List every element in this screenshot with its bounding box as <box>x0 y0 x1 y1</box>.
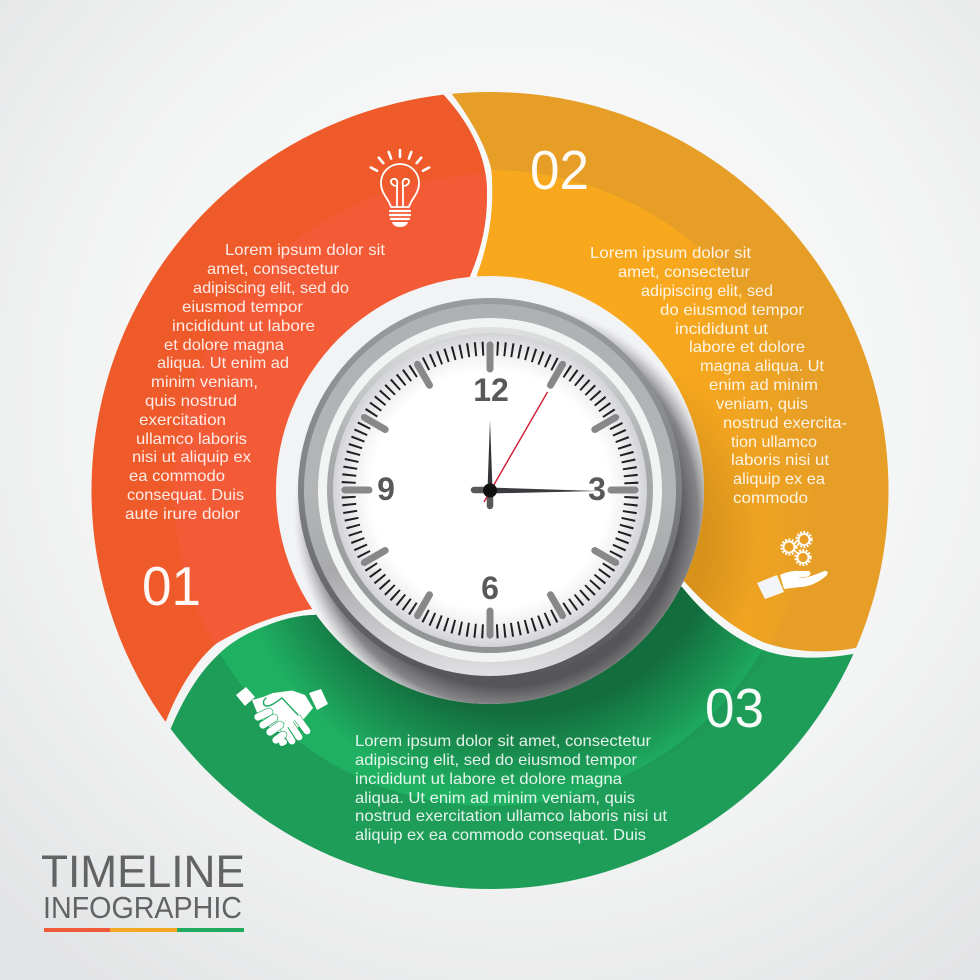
right hand fingers <box>283 712 307 741</box>
text block: segment 03: nostrud exercitation ullamco laboris nisi ut <box>355 808 668 825</box>
clock case inner metal <box>304 304 676 676</box>
text block: segment 01: consequat. Duis <box>127 487 244 504</box>
text block: segment 03: aliqua. Ut enim ad minim veniam, quis <box>355 790 635 807</box>
numerals: 12 <box>473 372 509 408</box>
text block: segment 01: exercitation <box>139 412 226 429</box>
number 02: 02 <box>530 139 589 201</box>
numerals <box>377 372 606 606</box>
panel: segment 02 orange <box>452 92 888 652</box>
minute ticks <box>348 348 632 632</box>
text block: segment 01: quis nostrud <box>145 393 237 410</box>
number 01: 01 <box>142 555 201 617</box>
left hand fingers <box>258 712 284 743</box>
text block: segment 02: laboris nisi ut <box>731 452 830 469</box>
right cuff <box>309 689 328 710</box>
text block: segment 02: amet, consectetur <box>618 264 751 281</box>
text block: segment 03: incididunt ut labore et dolore magna <box>355 771 622 788</box>
hour ticks <box>345 345 635 635</box>
text block: segment 02 <box>590 245 847 507</box>
numerals: 3 <box>588 471 606 507</box>
joined hands <box>252 690 313 736</box>
text block: segment 01: adipiscing elit, sed do <box>193 280 349 297</box>
text block: segment 02: aliquip ex ea <box>733 471 825 488</box>
clock face <box>333 333 647 647</box>
text block: segment 01: ullamco laboris <box>136 431 247 448</box>
text block: segment 01: et dolore magna <box>164 337 284 354</box>
text block: segment 03: adipiscing elit, sed do eiusmod tempor <box>355 752 638 769</box>
text block: segment 02: commodo <box>733 490 808 507</box>
circular segments <box>92 92 888 889</box>
panel: segment 03 green <box>170 586 854 889</box>
clock cast shadow <box>296 312 704 704</box>
number 03: 03 <box>705 677 764 739</box>
text block: segment 02: tion ullamco <box>731 434 817 451</box>
text block: segment 02: do eiusmod tempor <box>660 302 805 319</box>
panel: segment 01 red <box>92 94 488 722</box>
text block: segment 02: veniam, quis <box>716 396 808 413</box>
title underline <box>44 928 244 932</box>
text block: segment 01: incididunt ut labore <box>172 318 315 335</box>
clock hands <box>474 392 598 506</box>
text block: segment 02: Lorem ipsum dolor sit <box>590 245 752 262</box>
clock halo ring <box>276 276 704 704</box>
icon: light bulb <box>371 150 429 227</box>
cuff <box>757 575 784 599</box>
thumb outline <box>263 698 298 715</box>
text block: segment 03: aliquip ex ea commodo consequat. Duis <box>355 827 646 844</box>
hand <box>780 571 828 589</box>
text block: segment 01: aliqua. Ut enim ad <box>157 355 289 372</box>
left cuff <box>236 687 255 706</box>
icon: handshake <box>236 687 328 743</box>
white bezel <box>318 318 662 662</box>
text block: segment 03: Lorem ipsum dolor sit amet, consectetur <box>355 733 652 750</box>
text block: segment 01: aute irure dolor <box>125 506 241 523</box>
text block: segment 02: magna aliqua. Ut <box>700 358 825 375</box>
text block: segment 01: eiusmod tempor <box>182 299 304 316</box>
text block: segment 01: ea commodo <box>129 468 225 485</box>
title: TIMELINE <box>41 846 245 897</box>
text block: segment 02: labore et dolore <box>689 339 805 356</box>
text block: segment 02: incididunt ut <box>675 321 769 338</box>
clock <box>276 276 704 704</box>
text block: segment 01: amet, consectetur <box>207 261 340 278</box>
text block: segment 01 <box>125 242 386 523</box>
text block: segment 02: adipiscing elit, sed <box>641 283 773 300</box>
text block: segment 02: nostrud exercita- <box>723 415 847 432</box>
text block: segment 01: nisi ut aliquip ex <box>132 449 251 466</box>
grey bezel <box>327 327 653 653</box>
numerals: 9 <box>377 471 395 507</box>
icon: gears and hand <box>757 532 828 599</box>
numerals: 6 <box>481 570 499 606</box>
title <box>41 846 245 925</box>
text block: segment 01: Lorem ipsum dolor sit <box>225 242 386 259</box>
text block: segment 02: enim ad minim <box>709 377 818 394</box>
title: INFOGRAPHIC <box>43 890 242 925</box>
text block: segment 03 <box>355 733 668 844</box>
clock case outer metal <box>298 298 682 682</box>
text block: segment 01: minim veniam, <box>151 374 258 391</box>
gears <box>782 532 811 565</box>
